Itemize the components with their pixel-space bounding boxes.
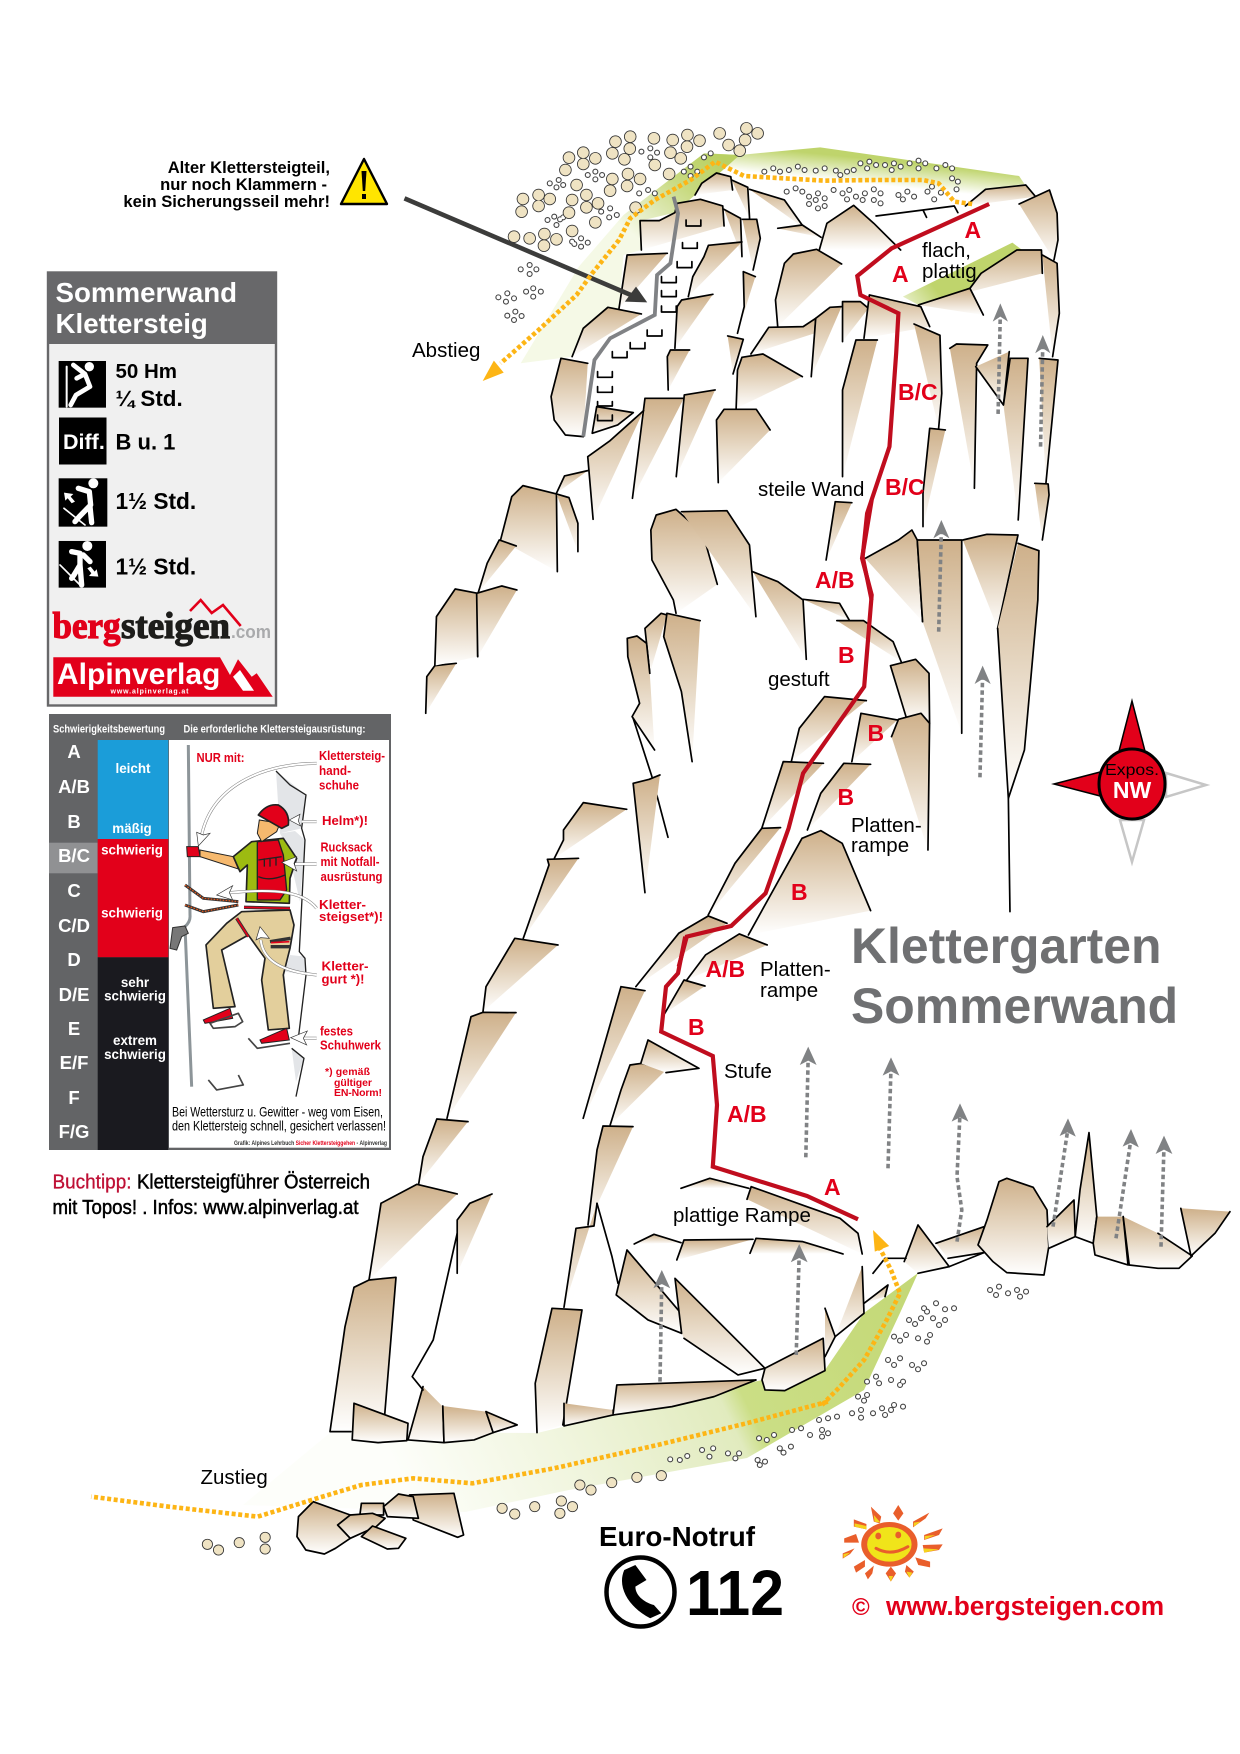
difficulty labels on route: A (964, 217, 981, 243)
equipment labels: NUR mit: (196, 750, 244, 765)
icon: difficulty (59, 418, 106, 464)
terrain labels: Platten- (851, 814, 922, 837)
terrain labels: Zustieg (200, 1466, 268, 1489)
difficulty colour scale (98, 740, 168, 1150)
book tip: mit Topos! . Infos: www.alpinverlag.at (52, 1197, 359, 1219)
difficulty colour scale: schwierig (101, 906, 163, 920)
logo: Alpinverlag: www.alpinverlag.at (110, 688, 189, 696)
equipment labels: gültiger (334, 1077, 372, 1089)
equipment labels: mit Notfall- (320, 854, 380, 869)
title (851, 918, 1178, 1034)
difficulty colour scale: schwierig (104, 1047, 166, 1062)
text: descent time: 1½ Std. (116, 554, 196, 580)
equipment labels: hand- (319, 763, 351, 778)
difficulty letters: B (67, 811, 81, 832)
text: height and time: 50 Hm (116, 360, 177, 383)
rock wall: middle section (426, 502, 1039, 987)
terrain labels: Abstieg (412, 339, 480, 362)
note: old section (123, 158, 330, 211)
emergency call: Euro-Notruf (599, 1521, 756, 1552)
difficulty labels on route: B (791, 879, 808, 905)
panel header: Klettersteig (56, 308, 208, 339)
logo: bergsteigen.com: berg (52, 606, 121, 647)
panel header text (53, 724, 366, 736)
difficulty labels on route: B (868, 720, 884, 746)
book tip: Buchtipp: (52, 1172, 132, 1194)
logo: bergsteigen.com: .com (231, 622, 271, 642)
panel: route facts (47, 272, 277, 706)
difficulty labels on route: B (838, 784, 854, 810)
equipment labels: festes (320, 1024, 353, 1038)
difficulty labels on route: A/B (706, 956, 745, 982)
terrain labels (200, 239, 977, 1489)
logo: Alpinverlag: Alpinverlag (57, 658, 220, 691)
book tip (52, 1172, 370, 1219)
website: www.bergsteigen.com (885, 1591, 1164, 1621)
text: difficulty: B u. 1 (116, 430, 175, 454)
book tip: Klettersteigführer Österreich (137, 1172, 370, 1194)
compass: exposure NW (1054, 701, 1206, 862)
emergency call: 112 (686, 1557, 784, 1629)
boulders (297, 1493, 464, 1554)
difficulty colour scale: mäßig (112, 821, 152, 836)
equipment labels: schuhe (319, 778, 359, 792)
old via ferrata section with rungs (583, 197, 701, 437)
difficulty labels on route: A/B (727, 1101, 767, 1127)
terrain labels: flach, (922, 239, 971, 262)
icon: difficulty: Diff. (63, 430, 105, 454)
equipment labels: Kletter- (322, 958, 368, 974)
note: old section: nur noch Klammern - (160, 175, 327, 194)
difficulty labels on route: A/B (815, 567, 855, 593)
difficulty letters: C/D (58, 915, 90, 936)
equipment labels: gurt *)! (322, 972, 364, 986)
arrows: equipment pointers (197, 763, 317, 1045)
difficulty letters: A/B (58, 776, 90, 797)
difficulty labels on route: A (892, 261, 909, 287)
difficulty letters: D/E (59, 984, 89, 1005)
difficulty letters (49, 741, 98, 1142)
text: weather warning: Bei Wettersturz u. Gewitter - weg vom Eisen, (172, 1104, 383, 1120)
difficulty labels on route: B/C (885, 474, 925, 500)
panel header text: Schwierigkeitsbewertung (53, 724, 165, 736)
panel header text: Die erforderliche Klettersteigausrüstung: (184, 724, 366, 736)
equipment labels: EN-Norm! (334, 1087, 382, 1099)
illustration: climber with equipment (170, 745, 306, 1097)
equipment labels (196, 748, 385, 1099)
scree stones: summit (498, 128, 958, 320)
note: old section: kein Sicherungsseil mehr! (123, 192, 330, 211)
difficulty letters: D (67, 949, 81, 970)
text: graphic credit: Grafik: Alpines Lehrbuch Sicher Klettersteiggehen - Alpinverlag (234, 1141, 387, 1147)
rock wall: upper section (478, 173, 1059, 593)
difficulty labels on route (688, 217, 981, 1200)
dashed grey arrows: free climbing lines lower (653, 1047, 1172, 1382)
compass: exposure NW: Expos. (1105, 762, 1159, 779)
difficulty letters: E/F (60, 1052, 88, 1073)
panel header (47, 272, 277, 344)
icon: phone (606, 1558, 674, 1626)
equipment labels: ausrüstung (320, 869, 383, 884)
note: old section: Alter Klettersteigteil, (168, 158, 330, 177)
difficulty labels on route: A (824, 1174, 841, 1200)
emergency call (599, 1521, 784, 1629)
difficulty colour scale: sehr (121, 975, 150, 990)
icon: descent time (59, 541, 106, 588)
terrain labels: Stufe (724, 1060, 772, 1083)
terrain labels: Platten- (760, 958, 831, 981)
difficulty labels on route: B (688, 1014, 705, 1040)
difficulty labels on route: B (838, 642, 855, 668)
difficulty letters: C (67, 880, 81, 901)
arrow: pointer to old section (404, 198, 647, 302)
difficulty letters: A (67, 741, 81, 762)
scree stones: foot of wall (759, 1287, 1026, 1440)
dashed grey arrows: free climbing lines middle (933, 520, 991, 777)
green slope: summit (521, 147, 1024, 363)
text: approach time: 1½ Std. (116, 488, 196, 514)
equipment labels: Klettersteig- (319, 748, 385, 763)
equipment labels: steigset*)! (319, 909, 383, 924)
terrain labels: gestuft (768, 668, 830, 691)
rock wall: lower section (330, 938, 1230, 1443)
equipment labels: Kletter- (319, 897, 366, 912)
difficulty letters: F/G (59, 1121, 89, 1142)
text: weather warning: den Klettersteig schnell, gesichert verlassen! (172, 1118, 386, 1134)
logo: Alpinverlag (53, 657, 273, 697)
text: weather warning (172, 1104, 386, 1134)
difficulty labels on route: B/C (898, 379, 938, 405)
website: © (852, 1594, 870, 1621)
difficulty colour scale: extrem (113, 1033, 157, 1048)
title: Sommerwand (851, 978, 1178, 1034)
icon: warning triangle (341, 159, 387, 204)
terrain labels: plattige Rampe (673, 1204, 811, 1227)
icon: approach time (59, 478, 107, 527)
scree stones: approach (207, 1447, 791, 1550)
terrain labels: plattig (922, 260, 977, 283)
title: Klettergarten (851, 918, 1162, 974)
route: approach path (91, 1230, 900, 1517)
difficulty colour scale: schwierig (104, 989, 166, 1004)
compass: exposure NW: NW (1113, 777, 1151, 803)
icon: sun (843, 1505, 943, 1582)
difficulty letters: F (68, 1087, 80, 1108)
terrain labels: rampe (851, 834, 909, 857)
terrain labels: steile Wand (758, 478, 864, 501)
logo: bergsteigen.com (52, 600, 271, 647)
route: descent path (483, 162, 972, 381)
terrain labels: rampe (760, 979, 818, 1002)
icon: ascent height (59, 361, 106, 408)
difficulty letters: E (68, 1018, 80, 1039)
dashed grey arrows: free climbing lines upper (993, 303, 1050, 447)
equipment labels: *) gemäß (325, 1066, 371, 1078)
panel header: Sommerwand (56, 277, 237, 308)
logo: bergsteigen.com: steigen (121, 606, 230, 647)
equipment labels: Schuhwerk (320, 1038, 382, 1052)
difficulty colour scale: leicht (116, 761, 151, 776)
equipment labels: Rucksack (320, 840, 373, 854)
text: height and time: ¼ Std. (116, 386, 183, 411)
route: via ferrata line (661, 204, 989, 1219)
green slope: approach (243, 1273, 918, 1512)
difficulty colour scale: schwierig (101, 842, 163, 858)
text: height and time (116, 360, 183, 411)
equipment labels: Helm*)! (322, 813, 368, 828)
panel: difficulty scale and equipment (49, 714, 391, 1150)
difficulty letters: B/C (58, 845, 90, 866)
